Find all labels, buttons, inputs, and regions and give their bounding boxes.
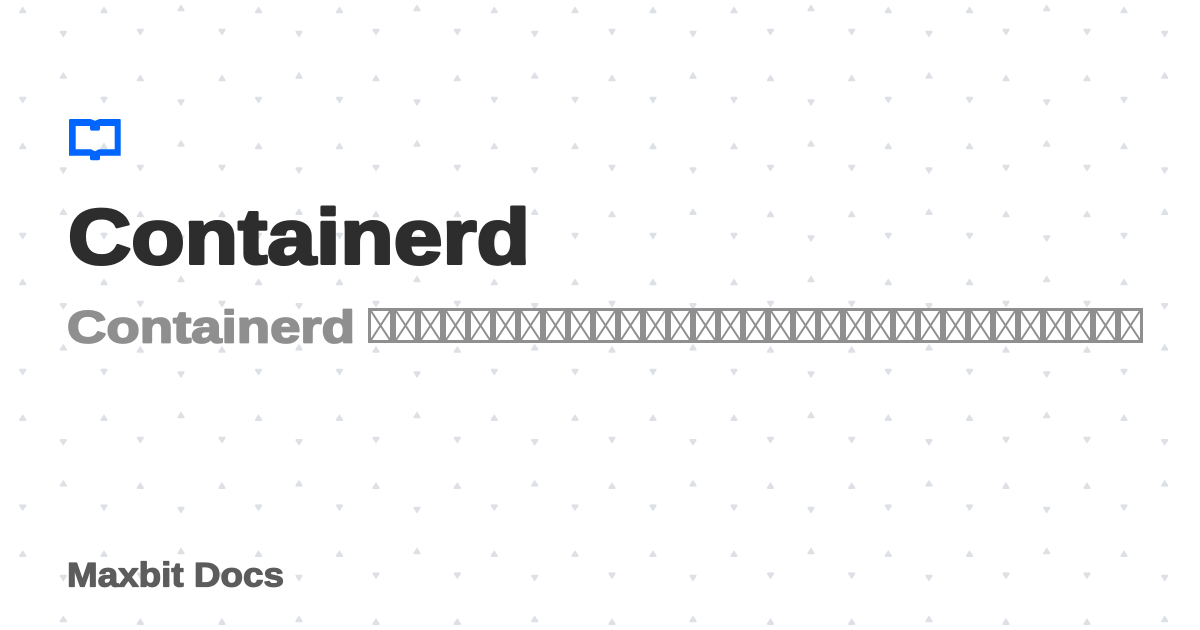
- subtitle missing-glyph boxes: [370, 310, 1142, 342]
- icon: open book: [69, 119, 121, 160]
- site name: Maxbit Docs: [67, 557, 284, 595]
- title: Containerd: [68, 192, 530, 280]
- subtitle: Containerd: [67, 301, 355, 352]
